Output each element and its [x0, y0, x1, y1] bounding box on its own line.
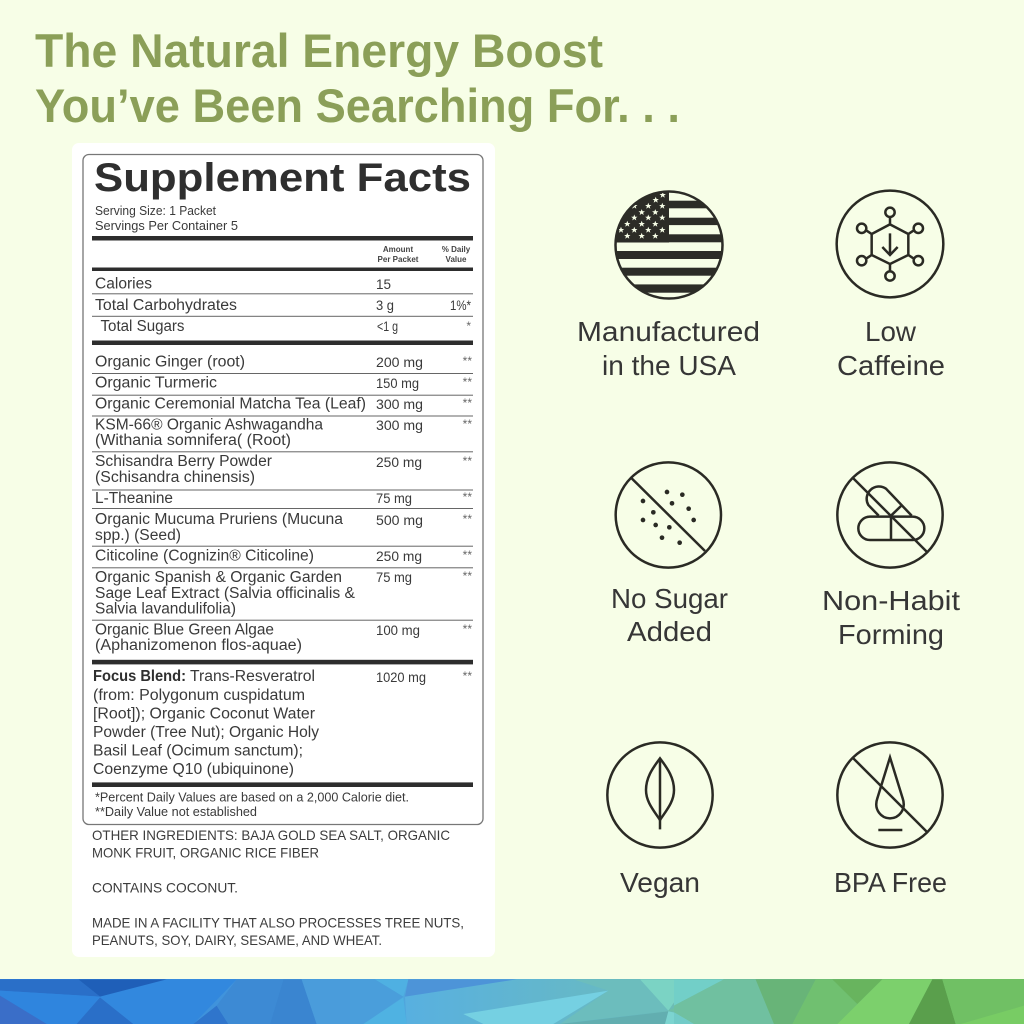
amounts column: 3 g — [376, 298, 394, 313]
footnotes: **Daily Value not established — [95, 804, 257, 819]
nutrient names — [95, 276, 366, 654]
label: low caffeine: Low — [865, 316, 917, 347]
label: manufactured in the usa: Manufactured — [577, 316, 760, 347]
amounts column: 250 mg — [376, 549, 422, 564]
nutrient names: Total Sugars — [100, 318, 185, 335]
amounts column: 500 mg — [376, 513, 423, 528]
other ingredients — [92, 827, 464, 948]
nutrient names: Organic Ginger (root) — [95, 354, 245, 370]
other ingredients: PEANUTS, SOY, DAIRY, SESAME, AND WHEAT. — [92, 932, 382, 948]
label: no sugar added — [611, 583, 728, 647]
nutrient names: Organic Blue Green Algae — [95, 622, 274, 638]
amounts column: 250 mg — [376, 455, 422, 470]
daily value column: ** — [463, 622, 472, 636]
daily value column: ** — [463, 454, 472, 468]
serving information — [95, 203, 238, 233]
label: non-habit forming — [822, 585, 960, 650]
daily value column: ** — [463, 375, 472, 389]
column headers: % Daily — [442, 245, 471, 254]
label: low caffeine — [837, 316, 945, 381]
amounts column: 300 mg — [376, 418, 423, 433]
icon: non-habit forming capsules — [837, 462, 943, 568]
serving information: Servings Per Container 5 — [95, 218, 238, 233]
icon: bpa free drop — [837, 742, 943, 848]
panel: supplement facts card — [72, 143, 495, 957]
amounts column: 300 mg — [376, 397, 423, 412]
daily value column: ** — [463, 490, 472, 504]
label: manufactured in the usa — [577, 316, 760, 381]
footer: low-poly gradient band — [0, 979, 1024, 1024]
daily value column: ** — [463, 354, 472, 368]
label: bpa free: BPA Free — [834, 867, 947, 898]
nutrient names: (Aphanizomenon flos-aquae) — [95, 637, 302, 654]
nutrient names: Organic Ceremonial Matcha Tea (Leaf) — [95, 396, 366, 412]
nutrient names: Citicoline (Cognizin® Citicoline) — [95, 548, 314, 564]
label: no sugar added: Added — [627, 616, 712, 647]
nutrient names: L-Theanine — [95, 490, 173, 507]
nutrient names: (Withania somnifera( (Root) — [95, 432, 291, 449]
nutrient names: Organic Spanish & Organic Garden — [95, 569, 342, 586]
focus blend: [Root]); Organic Coconut Water — [93, 706, 315, 722]
daily value column: ** — [463, 669, 472, 683]
amounts column: <1 g — [377, 319, 398, 334]
column headers: Amount — [383, 245, 413, 254]
other ingredients: OTHER INGREDIENTS: BAJA GOLD SEA SALT, ORGANIC — [92, 827, 450, 843]
nutrient names: Sage Leaf Extract (Salvia officinalis & — [95, 585, 356, 602]
daily value column: ** — [463, 396, 472, 410]
focus blend: Coenzyme Q10 (ubiquinone) — [93, 761, 294, 778]
amounts column: 150 mg — [376, 376, 419, 391]
nutrient names: Organic Mucuma Pruriens (Mucuna — [95, 511, 343, 528]
title: The Natural Energy Boost — [35, 24, 603, 77]
daily value column: ** — [463, 548, 472, 562]
footnotes: *Percent Daily Values are based on a 2,000 Calorie diet. — [95, 790, 409, 804]
title: You’ve Been Searching For. . . — [35, 79, 680, 132]
column headers: Per Packet — [378, 255, 419, 264]
daily value column: 1%* — [450, 298, 472, 313]
nutrient names: spp.) (Seed) — [95, 527, 181, 544]
daily value column — [450, 298, 472, 683]
nutrient names: Calories — [95, 276, 152, 292]
icon: usa flag — [614, 190, 724, 300]
daily value column: * — [466, 319, 471, 333]
other ingredients: MONK FRUIT, ORGANIC RICE FIBER — [92, 844, 319, 860]
daily value column: ** — [463, 512, 472, 526]
nutrient names: (Schisandra chinensis) — [95, 469, 255, 486]
focus blend: Powder (Tree Nut); Organic Holy — [93, 724, 319, 741]
title — [35, 24, 680, 132]
heading: supplement facts: Supplement Facts — [94, 156, 471, 200]
label: non-habit forming: Forming — [838, 619, 944, 650]
daily value column: ** — [463, 417, 472, 431]
other ingredients: CONTAINS COCONUT. — [92, 880, 238, 896]
icon: no sugar — [616, 462, 721, 568]
column headers: Value — [446, 255, 467, 264]
footnotes — [95, 790, 409, 819]
icon: vegan leaf — [607, 742, 713, 848]
amounts column: 200 mg — [376, 355, 423, 370]
amounts column: 1020 mg — [376, 670, 426, 685]
amounts column: 100 mg — [376, 623, 420, 638]
focus blend: Basil Leaf (Ocimum sanctum); — [93, 742, 303, 760]
nutrient names: KSM-66® Organic Ashwagandha — [95, 416, 323, 434]
table rules — [92, 236, 473, 787]
icon: low caffeine molecule — [837, 191, 943, 297]
daily value column: ** — [463, 569, 472, 583]
label: manufactured in the usa: in the USA — [602, 350, 736, 381]
focus blend — [93, 668, 319, 778]
nutrient names: Salvia lavandulifolia) — [95, 600, 236, 618]
amounts column: 75 mg — [376, 491, 412, 506]
focus blend: Trans-Resveratrol — [190, 668, 315, 685]
nutrient names: Organic Turmeric — [95, 374, 217, 392]
nutrient names: Total Carbohydrates — [95, 297, 237, 314]
amounts column: 15 — [376, 277, 391, 292]
label: non-habit forming: Non-Habit — [822, 585, 960, 616]
column headers — [378, 245, 471, 264]
label: low caffeine: Caffeine — [837, 350, 945, 381]
label: vegan: Vegan — [620, 867, 700, 898]
amounts column — [376, 277, 426, 685]
amounts column: 75 mg — [376, 570, 412, 585]
focus blend: (from: Polygonum cuspidatum — [93, 687, 305, 704]
serving information: Serving Size: 1 Packet — [95, 203, 216, 218]
label: no sugar added: No Sugar — [611, 583, 728, 614]
nutrient names: Schisandra Berry Powder — [95, 453, 272, 470]
focus blend: Focus Blend: — [93, 668, 186, 685]
other ingredients: MADE IN A FACILITY THAT ALSO PROCESSES TREE NUTS, — [92, 914, 464, 930]
